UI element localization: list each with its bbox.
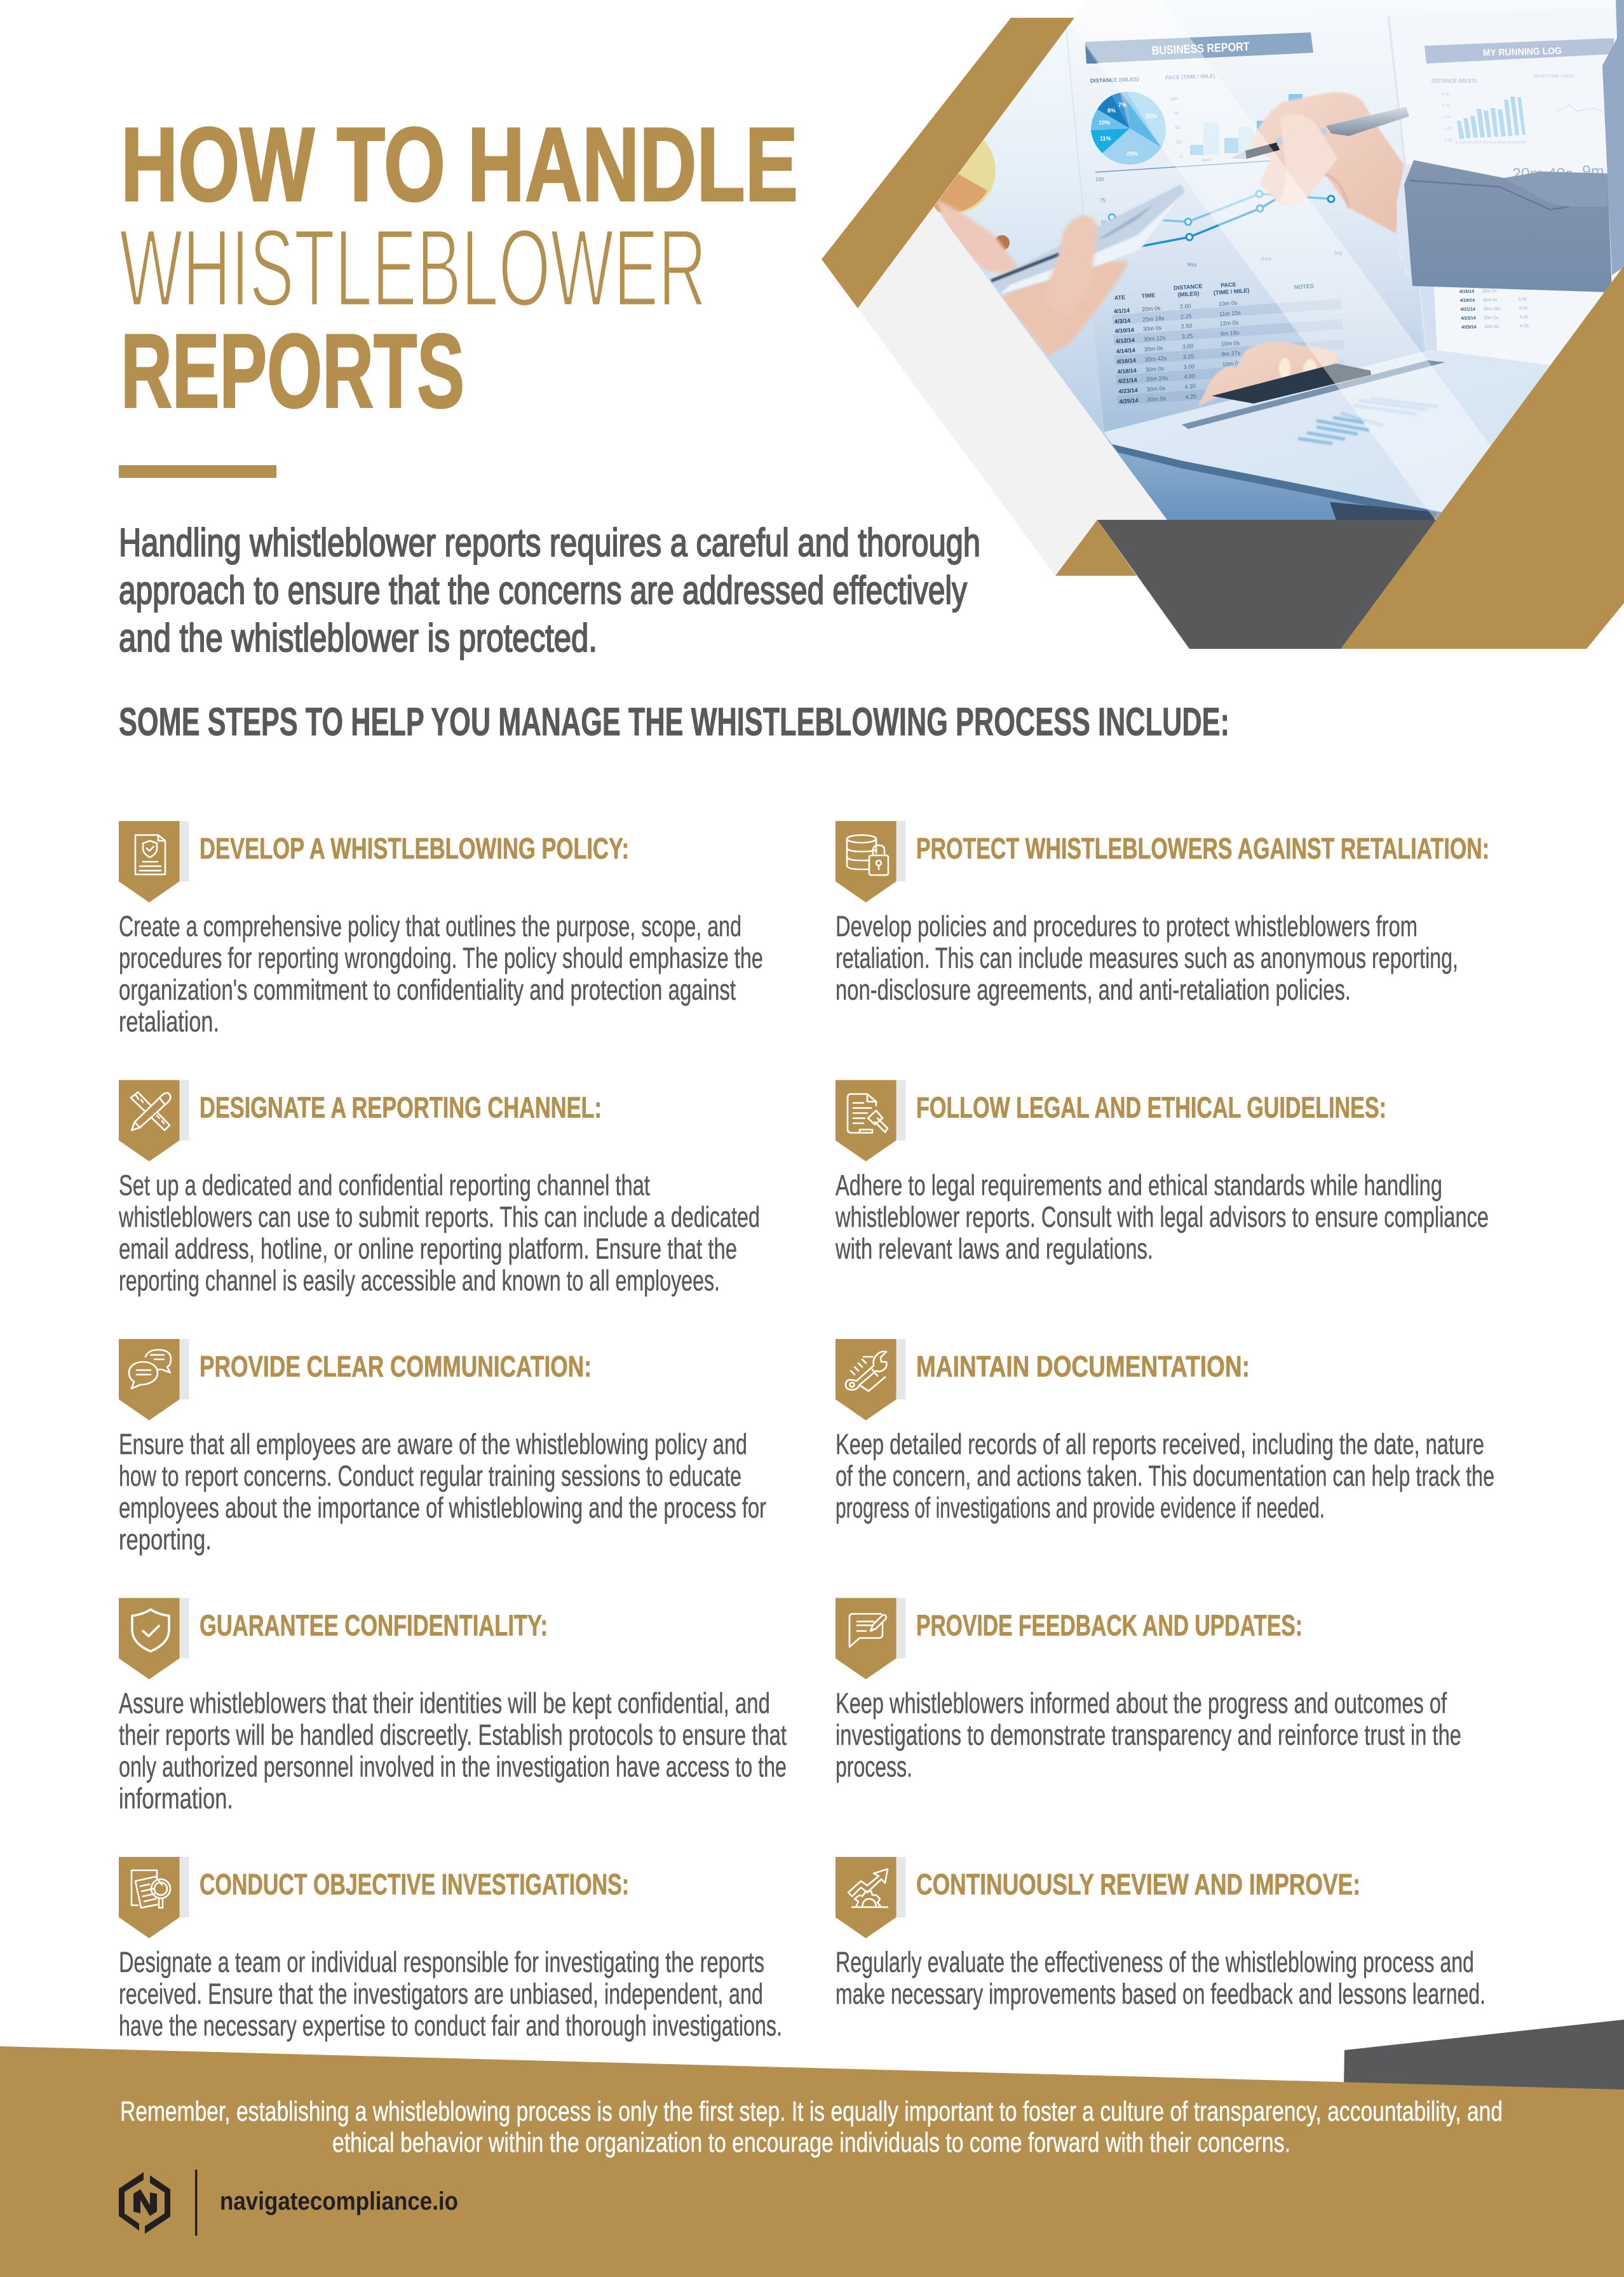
step: guarantee confidentiality: [119, 1598, 787, 1815]
body text: Create a comprehensive policy that outlines the purpose, scope, and: [119, 910, 741, 942]
body text: [836, 910, 1458, 1006]
right hand with pen: [1231, 92, 1409, 233]
data table: 25m 18s: [1142, 315, 1165, 323]
data table: DISTANCE: [1174, 283, 1203, 291]
icon badge: folder and magnifier: [119, 1857, 189, 1938]
bar chart: 0: [1180, 154, 1182, 160]
body text: [835, 1169, 1489, 1265]
icon badge: growth arrow and gear: [836, 1857, 906, 1938]
title: HOW TO HANDLE: [121, 105, 798, 222]
data table: 4.35: [1184, 383, 1196, 390]
icon badge: chat bubbles: [119, 1339, 189, 1420]
data table: 4/1/14: [1114, 307, 1130, 315]
data table: NOTES: [1294, 283, 1314, 290]
step: continuously review and improve: [836, 1857, 1485, 2010]
step: designate a reporting channel: [118, 1080, 760, 1296]
second report page: 4/18/14: [1460, 299, 1475, 303]
step: conduct objective investigations: [119, 1857, 782, 2042]
data table: 11m 15s: [1219, 309, 1242, 317]
second report page: PACE (TIME / MILE): [1534, 74, 1574, 79]
step: guarantee confidentiality: GUARANTEE CONFIDENTIALITY:: [200, 1609, 548, 1642]
second report page: 2.50: [1443, 115, 1451, 119]
business report banner: [1085, 32, 1313, 64]
icon badge: ruler and pencil: [119, 1080, 189, 1162]
second report page: 4.00: [1519, 306, 1528, 311]
step: protect whistleblowers against retaliation: [836, 821, 1489, 1006]
data table: 30m 24s: [1146, 374, 1168, 383]
second report page: 30m 0s: [1484, 316, 1499, 320]
logo mark: [119, 2172, 170, 2234]
step: develop a whistleblowing policy: [119, 821, 763, 1038]
body text: non-disclosure agreements, and anti-retaliation policies.: [836, 974, 1351, 1006]
intro paragraph: Handling whistleblower reports requires a careful and thorough: [119, 521, 980, 565]
body text: with relevant laws and regulations.: [835, 1233, 1153, 1265]
body text: how to report concerns. Conduct regular training sessions to educate: [119, 1460, 741, 1492]
translucent white diagonal overlay: [1053, 0, 1525, 534]
data table: TIME: [1141, 292, 1155, 299]
body text: [118, 1169, 760, 1296]
body text: information.: [119, 1782, 233, 1815]
step: maintain documentation: [836, 1339, 1494, 1524]
data table: 30m 0s: [1144, 345, 1163, 353]
step: conduct objective investigations: CONDUCT OBJECTIVE INVESTIGATIONS:: [200, 1868, 629, 1901]
second report page: 4/16/14: [1459, 290, 1475, 294]
step: follow legal and ethical guidelines: [835, 1080, 1489, 1265]
data table: 30m 0s: [1146, 385, 1166, 393]
body text: have the necessary expertise to conduct fair and thorough investigations.: [119, 2009, 782, 2042]
foreground paper on desk: [1104, 350, 1550, 520]
body text: their reports will be handled discreetly. Establish protocols to ensure that: [119, 1718, 787, 1751]
data table: 2.00: [1180, 303, 1191, 310]
data table: 3.25: [1182, 353, 1194, 360]
logo: navigatecompliance.io: [119, 2170, 458, 2236]
data table: 4/12/14: [1116, 337, 1135, 344]
second report page: 4.35: [1519, 315, 1528, 320]
data table: 4/3/14: [1114, 317, 1130, 325]
data table: 10m 0s: [1219, 299, 1238, 307]
footer dark accent shape: [1344, 2020, 1624, 2094]
second report page: 0.00: [1444, 139, 1452, 143]
data table: 4/25/14: [1119, 397, 1139, 405]
title: [119, 105, 798, 430]
body text: Designate a team or individual responsible for investigating the reports: [119, 1946, 764, 1978]
data table: 4/16/14: [1116, 357, 1136, 365]
second report page: 3.00: [1519, 297, 1527, 302]
hand holding black phone: [1198, 341, 1371, 407]
data table: 30m 42s: [1144, 355, 1167, 363]
pie chart: 10%: [1099, 119, 1110, 126]
data table: 30m 0s: [1145, 365, 1165, 373]
photo: business report charts with hands: 75: [1100, 198, 1106, 203]
main report page: [1097, 350, 1423, 432]
icon badge: policy document: [119, 821, 189, 902]
yellow pie on back page: [934, 140, 996, 214]
second report page: 30m 0s: [1482, 289, 1498, 294]
footer message: [120, 2096, 1503, 2158]
data table: 4/23/14: [1118, 387, 1138, 395]
data table: ATE: [1114, 294, 1125, 301]
second report page: 30m 0s: [1483, 298, 1498, 302]
data table: 4/14/14: [1116, 347, 1135, 355]
data table: 30m 0s: [1143, 325, 1162, 332]
bar chart: [1170, 94, 1303, 163]
pie chart: 35%: [1146, 113, 1157, 119]
data table: 3.00: [1182, 343, 1194, 350]
data table: 30m 0s: [1147, 395, 1167, 403]
second report page: 4/25/14: [1461, 325, 1477, 330]
body text: employees about the importance of whistleblowing and the process for: [119, 1492, 766, 1524]
data table: [1111, 273, 1346, 405]
data table: 4/10/14: [1115, 327, 1134, 334]
title underline bar: [119, 465, 276, 478]
data table: 9m 27s: [1221, 350, 1241, 357]
second report page: 30m 0s: [1484, 325, 1499, 329]
body text: Develop policies and procedures to protect whistleblowers from: [836, 910, 1418, 942]
intro paragraph: [119, 521, 980, 660]
data table: PACE: [1221, 281, 1236, 289]
gold top-left parallelogram: [822, 18, 1074, 308]
dark trapezoid: [1097, 520, 1437, 649]
data table: 4.00: [1184, 373, 1195, 380]
footer message: ethical behavior within the organization to encourage individuals to come forward with their concerns.: [332, 2127, 1290, 2158]
suit sleeve and cuff: [1397, 0, 1624, 292]
body text: [119, 1428, 766, 1556]
photo: business report charts with hands: May: [1188, 262, 1197, 268]
body text: procedures for reporting wrongdoing. The policy should emphasize the: [119, 942, 763, 974]
body text: [836, 1946, 1485, 2010]
body text: Set up a dedicated and confidential reporting channel that: [119, 1169, 650, 1201]
body text: retaliation.: [119, 1005, 219, 1038]
business report banner: BUSINESS REPORT: [1151, 40, 1250, 58]
bar chart: 50: [1175, 125, 1180, 130]
body text: [836, 1428, 1494, 1524]
body text: email address, hotline, or online reporting platform. Ensure that the: [119, 1233, 737, 1265]
body text: whistleblowers can use to submit reports. This can include a dedicated: [118, 1201, 760, 1233]
second report page: 5.00: [1442, 92, 1450, 97]
second report page: DISTANCE (MILES): [1431, 78, 1477, 84]
second report page: [1388, 6, 1624, 375]
body text: Ensure that all employees are aware of the whistleblowing policy and: [119, 1428, 747, 1460]
data table: 20m 0s: [1142, 305, 1161, 313]
data table: 3.00: [1183, 364, 1194, 370]
body text: organization's commitment to confidentiality and protection against: [119, 974, 736, 1006]
logo: navigatecompliance.io: navigatecompliance.io: [220, 2187, 458, 2215]
photo: business report charts with hands: 100: [1095, 177, 1104, 182]
body text: reporting.: [119, 1523, 212, 1556]
data table: 10m 0s: [1222, 360, 1242, 367]
photo: business report charts with hands: PACE (TIME / MILE): [1165, 72, 1215, 81]
pie chart: 29%: [1127, 151, 1138, 157]
desk area below paper: [1108, 440, 1446, 520]
body text: reporting channel is easily accessible and known to all employees.: [119, 1265, 720, 1296]
second report page: 4/1/14 4/10/14 4/14/14 4/18/14 4/23/14: [1455, 140, 1526, 145]
step: provide feedback and updates: [836, 1598, 1461, 1783]
second report page: 3.75: [1442, 104, 1451, 108]
step: follow legal and ethical guidelines: FOLLOW LEGAL AND ETHICAL GUIDELINES:: [916, 1091, 1386, 1124]
data table: 9m 18s: [1221, 329, 1240, 337]
intro paragraph: and the whistleblower is protected.: [119, 616, 597, 660]
second report page: 1.25: [1444, 126, 1452, 131]
photo: business report charts with hands: [908, 0, 1624, 534]
hero graphic: geometric shapes and photo: [822, 0, 1624, 649]
step: designate a reporting channel: DESIGNATE A REPORTING CHANNEL:: [200, 1091, 602, 1124]
second report page: 30m 24s: [1483, 307, 1501, 311]
pie chart: 8%: [1107, 107, 1116, 114]
body text: progress of investigations and provide evidence if needed.: [836, 1492, 1325, 1524]
body text: process.: [836, 1750, 912, 1783]
second report page: 4/23/14: [1461, 316, 1476, 321]
body text: [836, 1687, 1461, 1783]
second report page: 4.25: [1520, 324, 1529, 329]
second report page: 20m 40s: [1512, 165, 1573, 183]
pie chart: 7%: [1118, 102, 1127, 108]
step: provide feedback and updates: PROVIDE FEEDBACK AND UPDATES:: [916, 1609, 1303, 1642]
second report page: MY RUNNING LOG: [1483, 46, 1562, 58]
light grey diagonal band: [858, 207, 1167, 576]
bar chart: 25: [1176, 139, 1181, 145]
intro paragraph: approach to ensure that the concerns are addressed effectively: [119, 569, 967, 613]
large gold shape bottom right: [1341, 266, 1624, 649]
icon badge: document and gavel: [836, 1080, 906, 1162]
second report page: 4/21/14: [1460, 308, 1475, 312]
bar chart: April: [1201, 157, 1211, 163]
data table: 30m 12s: [1144, 334, 1166, 343]
title: REPORTS: [121, 313, 464, 430]
bar chart: 75: [1174, 111, 1179, 116]
bar chart: 100: [1170, 96, 1178, 102]
body text: Assure whistleblowers that their identities will be kept confidential, and: [119, 1687, 770, 1720]
data table: 3.25: [1182, 333, 1193, 340]
data table: 4.25: [1185, 393, 1196, 400]
data table: 10m 0s: [1221, 339, 1240, 347]
photo: business report charts with hands: June: [1261, 256, 1272, 262]
line chart: [1108, 189, 1336, 248]
title: WHISTLEBLOWER: [119, 206, 707, 329]
data table: 4/18/14: [1117, 367, 1137, 375]
body text: [119, 1687, 787, 1815]
step: provide clear communication: [119, 1339, 766, 1556]
footer panel: [0, 2046, 1624, 2277]
data table: 2.25: [1181, 313, 1192, 320]
icon badge: message with pencil: [836, 1598, 906, 1679]
data table: 2.50: [1181, 323, 1193, 330]
step: develop a whistleblowing policy: DEVELOP A WHISTLEBLOWING POLICY:: [200, 832, 629, 865]
icon badge: shield check: [119, 1598, 189, 1679]
data table: (TIME / MILE): [1214, 287, 1250, 296]
pie chart: 11%: [1100, 135, 1111, 142]
icon badge: database and lock: [836, 821, 906, 902]
body text: [119, 1946, 782, 2042]
step: continuously review and improve: CONTINUOUSLY REVIEW AND IMPROVE:: [916, 1868, 1360, 1901]
body text: [119, 910, 763, 1038]
step: provide clear communication: PROVIDE CLEAR COMMUNICATION:: [200, 1350, 592, 1383]
photo: business report charts with hands: 50: [1101, 220, 1107, 226]
second report page: 9m: [1582, 163, 1604, 180]
pie chart: [1091, 92, 1166, 165]
step: maintain documentation: MAINTAIN DOCUMENTATION:: [916, 1350, 1250, 1383]
data table: 12m 0s: [1220, 319, 1239, 327]
data table: (MILES): [1178, 290, 1200, 298]
data table: 4/21/14: [1118, 377, 1137, 384]
photo: business report charts with hands: DISTANCE (MILES): [1090, 76, 1139, 84]
body text: only authorized personnel involved in the investigation have access to the: [119, 1750, 787, 1783]
left hand and tablet: [936, 184, 1185, 356]
body text: received. Ensure that the investigators are unbiased, independent, and: [119, 1978, 763, 2010]
photo: business report charts with hands: July: [1334, 250, 1343, 256]
icon badge: hand and wrench: [836, 1339, 906, 1420]
small gold triangle: [1055, 520, 1137, 576]
